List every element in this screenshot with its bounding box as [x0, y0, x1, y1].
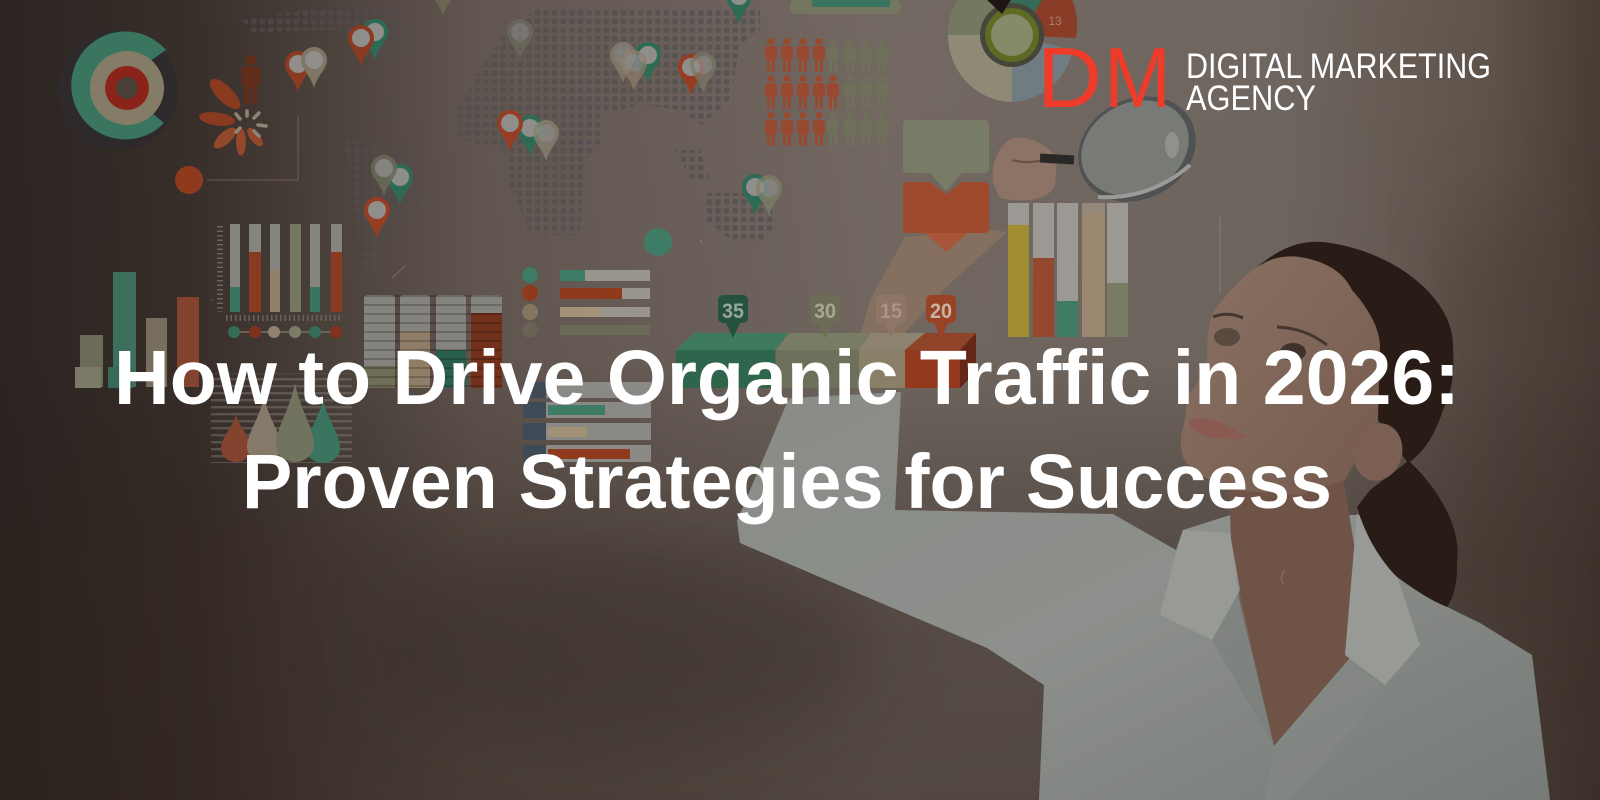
3d platforms with number tags: 20 [930, 300, 952, 323]
hair and ponytail [1257, 242, 1458, 607]
face [1181, 256, 1380, 495]
woman with magnifying glass [737, 76, 1550, 800]
logo: DM Digital Marketing Agency [1037, 31, 1491, 126]
title: How to Drive Organic Traffic in 2026: [114, 335, 1460, 421]
coin stack chart [364, 295, 502, 388]
target donut chart [58, 30, 178, 150]
speech bubbles [903, 120, 989, 252]
logo mark [1037, 31, 1171, 126]
pie chart with 13 label [948, 0, 1077, 102]
table bars [523, 382, 651, 462]
top pill chart fragment [790, 0, 901, 14]
hand [992, 138, 1057, 200]
legend progress bars [522, 267, 650, 338]
droplet chart [211, 373, 352, 463]
3d platforms with number tags: 30 [814, 300, 836, 323]
logo mark: M [1104, 31, 1171, 126]
neck [1225, 450, 1357, 746]
bar chart: 3d columns [75, 272, 199, 388]
title: Proven Strategies for Success [242, 439, 1332, 525]
shirt collar [1160, 513, 1420, 800]
map pins [285, 0, 782, 238]
column gauges by the magnifier [1008, 203, 1128, 337]
people pictogram [765, 38, 888, 146]
3d platforms with number tags [676, 295, 976, 388]
pie chart with 13 label: 13 [1048, 14, 1062, 28]
eyes, brows and lips [1188, 314, 1327, 439]
logo wordmark [1186, 47, 1491, 118]
3d platforms with number tags: 15 [880, 300, 902, 323]
logo wordmark: AGENCY [1186, 79, 1316, 118]
film scratches [210, 217, 1285, 584]
green dot [644, 228, 672, 256]
logo wordmark: DIGITAL MARKETING [1186, 47, 1491, 86]
shirt [737, 392, 1550, 800]
3d platforms with number tags: 35 [722, 300, 744, 323]
gauge column chart [220, 224, 342, 338]
magnifying glass [1040, 76, 1214, 222]
world map dots [243, 8, 776, 272]
title [114, 335, 1460, 525]
forearm behind overlays [860, 230, 1007, 335]
icon: person and petal burst [175, 55, 298, 194]
ear [1347, 418, 1409, 486]
logo mark: D [1037, 31, 1102, 126]
